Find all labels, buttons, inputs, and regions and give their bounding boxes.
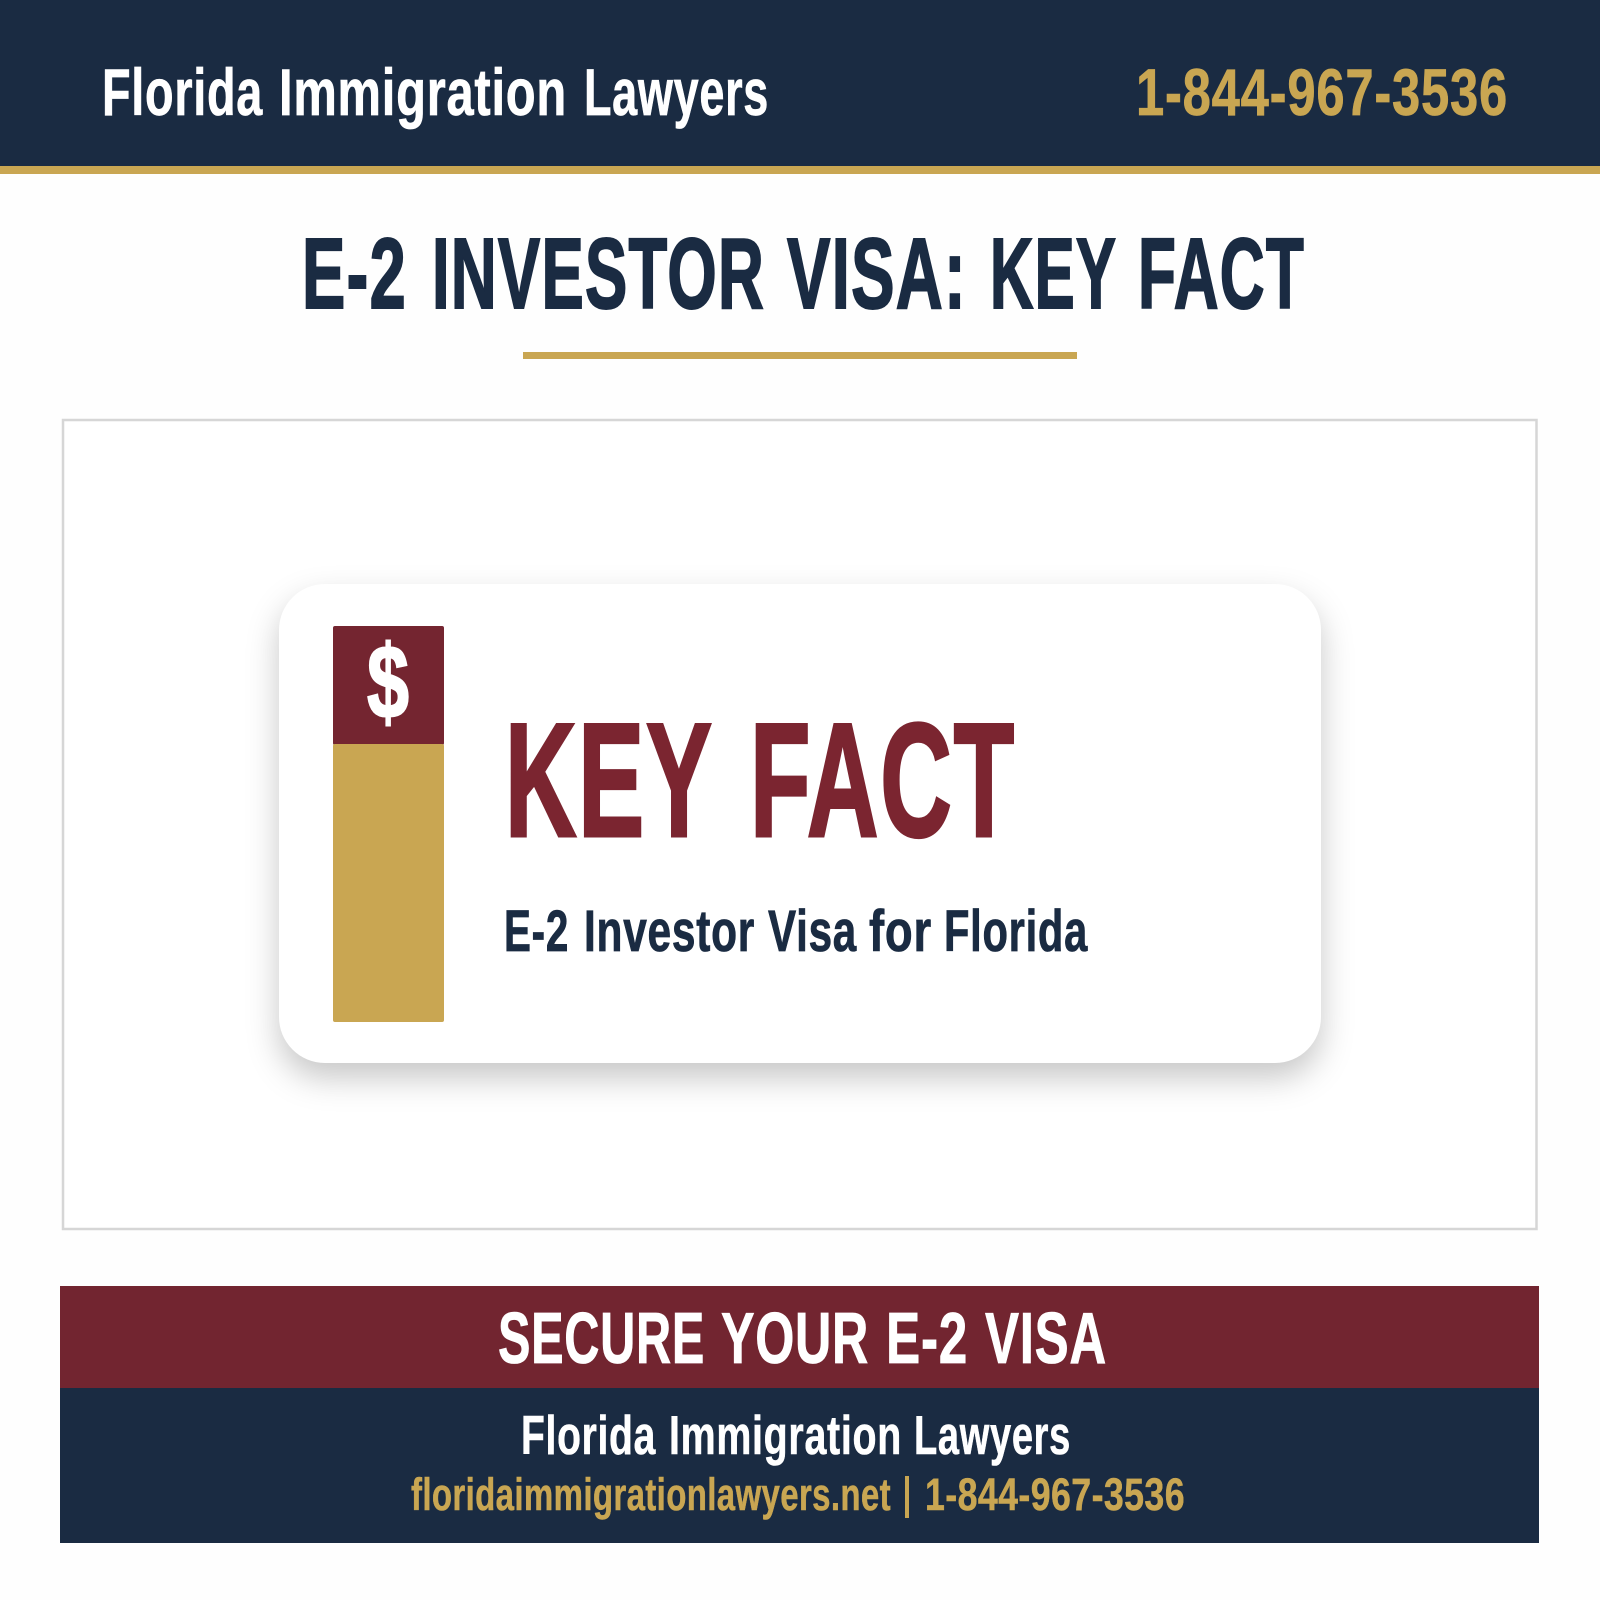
key fact subtitle: Florida [944, 899, 1088, 964]
call to action heading: YOUR [721, 1299, 869, 1379]
icon: dollar sign block: $ [367, 625, 409, 741]
key fact subtitle: Investor [584, 899, 755, 964]
title: E-2 [302, 218, 407, 330]
footer phone number: 1-844-967-3536 [925, 1469, 1185, 1520]
panel: main frame [63, 420, 1536, 1229]
title: KEY [990, 218, 1116, 330]
footer firm name: Lawyers [914, 1404, 1071, 1466]
key fact subtitle: for [869, 899, 932, 964]
title: INVESTOR [432, 218, 765, 330]
footer contact block [60, 1388, 1539, 1543]
key fact subtitle: E-2 [504, 899, 569, 964]
icon: dollar sign block [333, 625, 444, 745]
footer separator [905, 1476, 909, 1518]
footer website: floridaimmigrationlawyers.net [411, 1469, 891, 1520]
title: VISA: [787, 218, 967, 330]
header bar [0, 0, 1600, 174]
title: FACT [1138, 218, 1305, 330]
panel: key fact card [279, 584, 1321, 1063]
call to action heading: VISA [985, 1299, 1107, 1379]
key fact subtitle: Visa [768, 899, 857, 964]
key fact heading: FACT [750, 690, 1016, 871]
call to action heading: E-2 [886, 1299, 968, 1379]
header firm name: Florida [102, 55, 263, 129]
title underline [523, 352, 1077, 359]
call to action banner [60, 1286, 1539, 1389]
header firm name: Lawyers [584, 55, 769, 129]
footer firm name: Florida [521, 1404, 656, 1466]
gold accent bar [333, 744, 444, 1022]
key fact heading: KEY [505, 690, 712, 871]
header firm name: Immigration [279, 55, 567, 129]
footer firm name: Immigration [669, 1404, 902, 1466]
call to action heading: SECURE [498, 1299, 705, 1379]
